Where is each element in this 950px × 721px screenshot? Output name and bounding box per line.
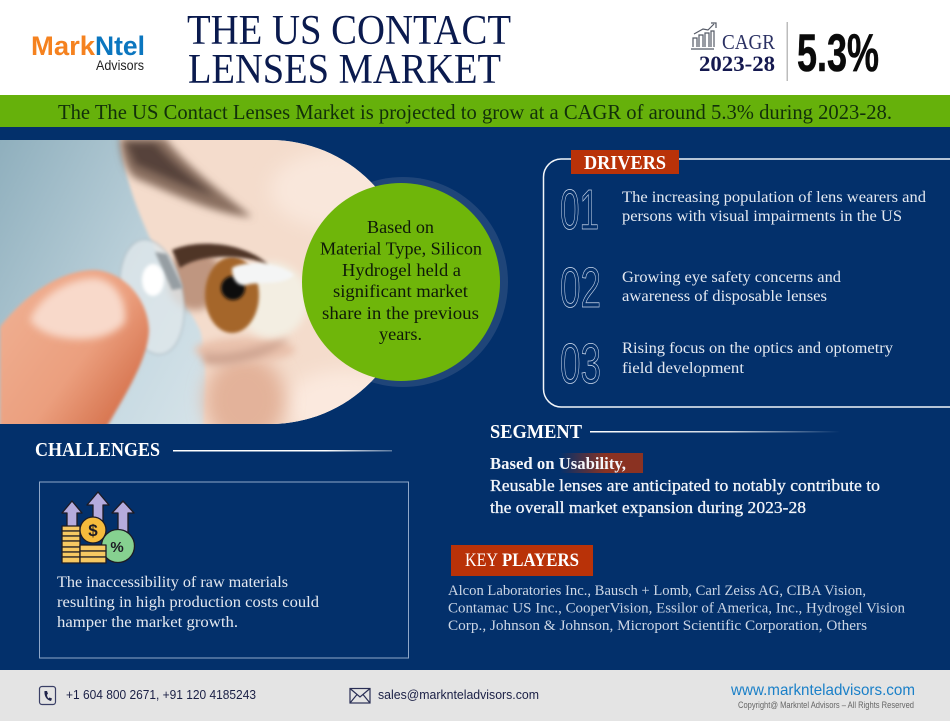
challenges section (35, 439, 408, 658)
icon: phone (40, 686, 56, 704)
icon: growth chart (691, 23, 716, 49)
callout: material type: Hydrogel held a (342, 260, 461, 280)
driver 02: 02 (560, 256, 601, 320)
email: sales@marknteladvisors.com (378, 687, 539, 702)
key players heading: PLAYERS (502, 550, 579, 571)
icon: mail (350, 688, 370, 703)
copyright: Copyright@ Markntel Advisors – All Rights Reserved (738, 700, 914, 710)
title (187, 8, 511, 93)
title: THE US CONTACT (187, 8, 511, 54)
key players list: Contamac US Inc., CooperVision, Essilor of America, Inc., Hydrogel Vision (448, 600, 905, 616)
logo: Ntel (95, 31, 145, 61)
footer (0, 670, 950, 721)
eyebrow (120, 138, 252, 217)
eye socket shadow (167, 250, 223, 310)
key players list: Alcon Laboratories Inc., Bausch + Lomb, Carl Zeiss AG, CIBA Vision, (448, 583, 866, 599)
segment text: Based on Usability, (490, 454, 626, 473)
driver 01: 01 (560, 178, 599, 242)
iris (205, 257, 259, 333)
eye highlight (232, 263, 294, 285)
segment text: Reusable lenses are anticipated to notably contribute to (490, 476, 880, 495)
key players list: Corp., Johnson & Johnson, Microport Scientific Corporation, Others (448, 618, 867, 634)
challenge text: The inaccessibility of raw materials (57, 574, 288, 591)
face (119, 140, 375, 424)
CAGR label: CAGR (722, 30, 775, 54)
website: www.marknteladvisors.com (730, 682, 915, 699)
logo: Mark (31, 31, 96, 61)
panel: drivers (544, 150, 950, 407)
pupil (221, 276, 245, 300)
drivers heading: DRIVERS (584, 152, 666, 174)
CAGR label: 2023-28 (699, 51, 775, 76)
driver 03: field development (622, 360, 745, 377)
lower lashes (202, 338, 290, 365)
challenge text: hamper the market growth. (57, 614, 238, 631)
callout ring behind photo (298, 177, 508, 387)
key players heading (451, 545, 593, 576)
subtitle banner (0, 95, 950, 127)
icon: rising costs: $ (88, 521, 98, 540)
CAGR label (699, 30, 775, 76)
callout: material type: Based on (367, 217, 434, 237)
callout: material type: significant market (333, 281, 468, 301)
navy background (0, 127, 950, 670)
header band (0, 0, 950, 95)
challenge text: resulting in high production costs could (57, 594, 319, 611)
sclera (248, 261, 306, 340)
key players list (448, 583, 905, 634)
icon: rising costs: % (110, 539, 124, 556)
driver 02 (560, 256, 841, 320)
driver 01 (560, 178, 926, 242)
driver 03 (560, 332, 893, 396)
icon: rising costs (62, 492, 134, 563)
segment section (490, 421, 880, 517)
callout: material type: share in the previous (322, 303, 479, 323)
callout: material type (302, 183, 500, 381)
callout: material type: Material Type, Silicon (320, 238, 482, 258)
CAGR value: 5.3% (797, 24, 879, 83)
driver 03: 03 (560, 332, 601, 396)
challenges box (40, 482, 408, 658)
challenges heading: CHALLENGES (35, 439, 160, 461)
subtitle banner: The The US Contact Lenses Market is projected to grow at a CAGR of around 5.3% during 2023-28. (58, 100, 892, 124)
title: LENSES MARKET (188, 47, 501, 93)
segment text (490, 454, 880, 517)
key players heading: KEY (465, 550, 498, 571)
challenge text (57, 574, 319, 631)
segment text: the overall market expansion during 2023-28 (490, 498, 806, 517)
driver 02: awareness of disposable lenses (622, 288, 827, 305)
photo: eye with contact lens (0, 140, 375, 424)
callout: material type: years. (379, 324, 422, 344)
driver 02: Growing eye safety concerns and (622, 269, 841, 286)
key players section (448, 545, 905, 634)
lens (120, 239, 186, 352)
driver 03: Rising focus on the optics and optometry (622, 340, 893, 357)
fingernail (30, 278, 125, 339)
logo (31, 31, 145, 73)
phone numbers: +1 604 800 2671, +91 120 4185243 (66, 687, 256, 702)
driver 01: persons with visual impairments in the US (622, 208, 902, 225)
logo: Advisors (96, 57, 144, 73)
upper eyelid (172, 244, 268, 268)
segment heading: SEGMENT (490, 421, 583, 443)
finger (0, 270, 149, 430)
driver 01: The increasing population of lens wearers and (622, 189, 926, 206)
